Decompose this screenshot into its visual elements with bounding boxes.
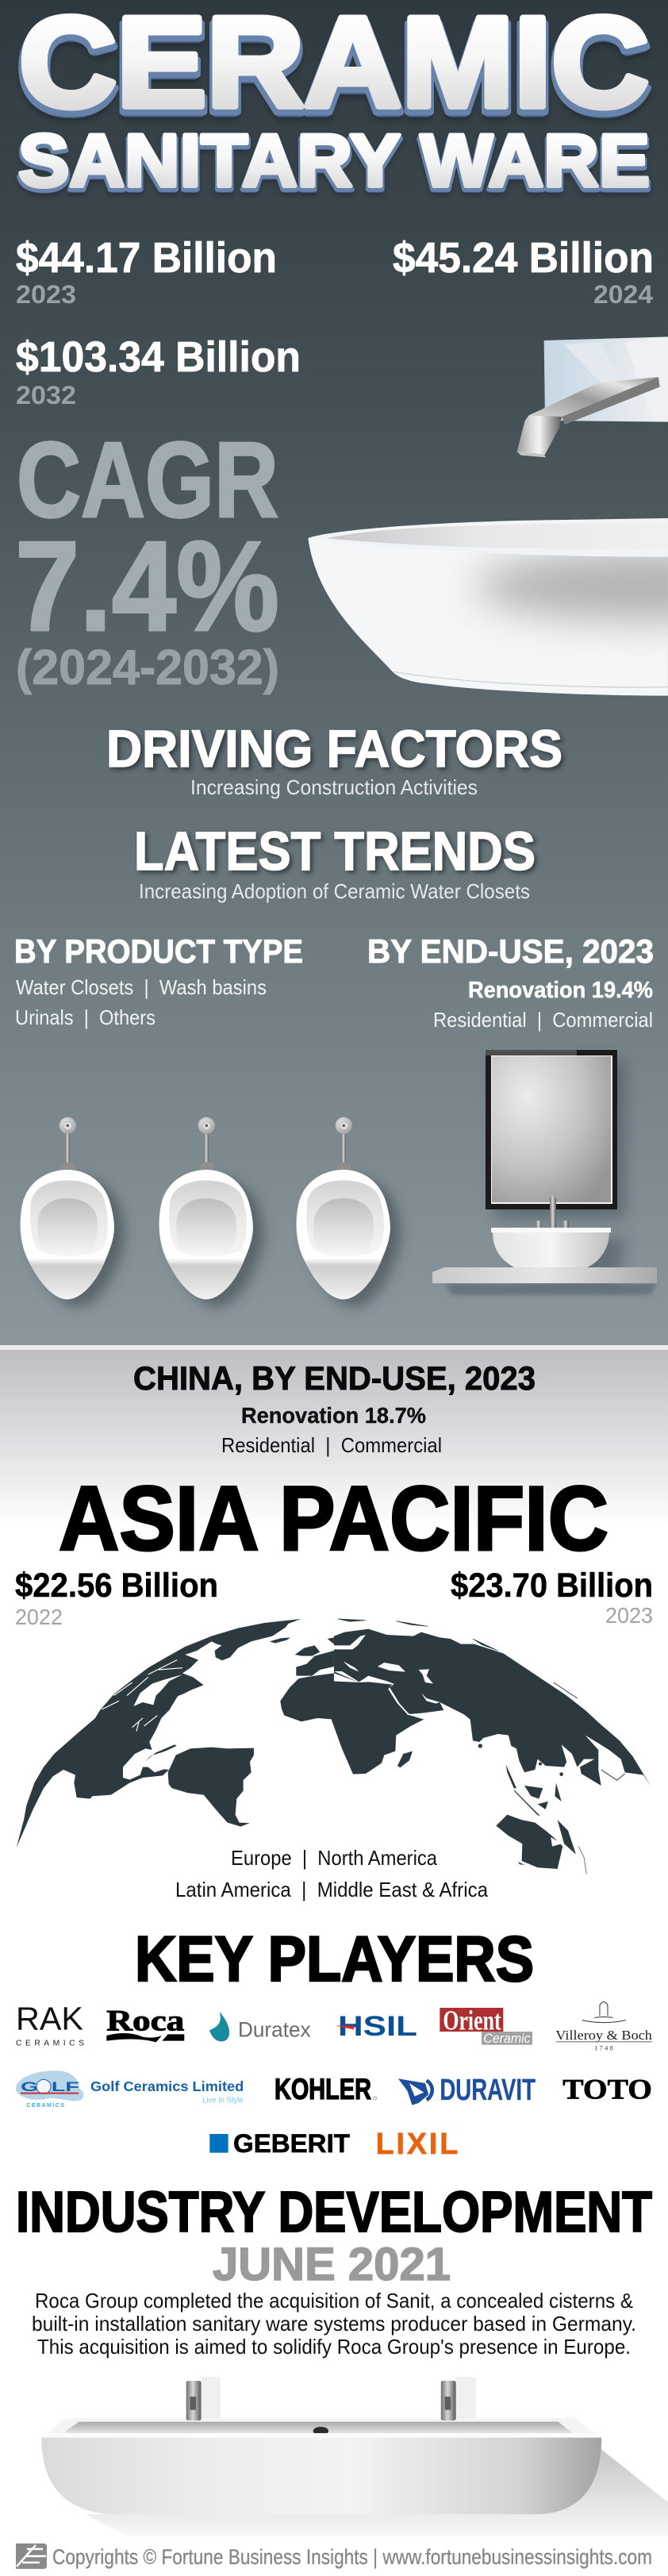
heading: China by end-use: CHINA, BY END-USE, 2023: [133, 1359, 536, 1397]
text: end-use values: Residential | Commercial: [433, 1008, 653, 1032]
icon: urinal 3: [297, 1117, 401, 1307]
text: product types: [15, 975, 267, 1029]
icon: urinal 1: [21, 1117, 125, 1307]
text: development description: [32, 2289, 636, 2359]
title: Sanitary Ware: SANITARY WARE: [18, 125, 650, 209]
logo: Duravit: [398, 2073, 536, 2106]
text: China renovation share: Renovation 18.7%: [241, 1403, 426, 1428]
text: China end-use segments: Residential | Commercial: [221, 1433, 442, 1457]
stat: 2032 market size: [16, 333, 301, 409]
stat: 2024 market size: [393, 234, 654, 309]
panel: dark hero background: [0, 0, 668, 1345]
stat: 2032 market size: $103.34 Billion: [16, 333, 301, 381]
heading: by product type: BY PRODUCT TYPE: [14, 932, 303, 970]
logo: RAK Ceramics: RAK: [16, 2000, 83, 2036]
stat: CAGR: [15, 420, 279, 695]
stat: Asia Pacific 2022: $22.56 Billion: [15, 1567, 218, 1605]
logos: key players left half: [16, 2000, 458, 2160]
stat: 2023 market size: 2023: [16, 280, 76, 309]
title: Ceramic: CERAMIC: [17, 0, 647, 140]
stat: 2024 market size: $45.24 Billion: [393, 234, 654, 282]
heading: driving factors: DRIVING FACTORS: [106, 719, 562, 778]
logo: Golf Ceramics Limited: Golf Ceramics Limited: [90, 2078, 244, 2094]
text: product types: Urinals | Others: [15, 1005, 155, 1029]
stat: Asia Pacific 2023: $23.70 Billion: [451, 1567, 653, 1605]
stat: 2024 market size: 2024: [593, 280, 653, 309]
logo: Golf Ceramics Limited: G LF: [21, 2079, 79, 2094]
logo: Villeroy and Boch: [555, 2001, 652, 2051]
logo: HSIL: HSIL: [338, 2011, 417, 2042]
stat: Asia Pacific 2023: 2023: [605, 1603, 653, 1628]
heading: date: JUNE 2021: [213, 2239, 451, 2290]
stat: Asia Pacific 2022: [15, 1567, 218, 1629]
logo: Duratex: [209, 2012, 311, 2042]
stat: 2032 market size: 2032: [16, 381, 76, 409]
text: other regions line 2: Latin America | Middle East & Africa: [175, 1878, 488, 1901]
heading: Asia Pacific: ASIA PACIFIC: [59, 1468, 608, 1570]
icon: mirror and sink on shelf: [432, 1050, 657, 1295]
title: Ceramic: CERAMIC: [21, 0, 651, 140]
text: end-use values: [433, 978, 653, 1032]
logo: Lixil: LIXIL: [376, 2127, 458, 2160]
heading: driving factors: DRIVING FACTORS: [109, 721, 565, 780]
text: development description: This acquisition is aimed to solidify Roca Group's presence in Europe.: [37, 2335, 631, 2359]
heading: key players: KEY PLAYERS: [135, 1924, 534, 1995]
logo: Villeroy and Boch: 1748: [594, 2044, 613, 2051]
heading: latest trends: LATEST TRENDS: [134, 821, 536, 882]
text: driving factor: Increasing Construction Activities: [190, 775, 478, 799]
stat: 2023 market size: $44.17 Billion: [16, 234, 277, 282]
text: other regions line 1: Europe | North America: [231, 1846, 437, 1870]
heading: by end-use: BY END-USE, 2023: [367, 932, 654, 970]
logo: Duravit: DURAVIT: [440, 2073, 536, 2106]
icon: urinal 2: [159, 1117, 263, 1307]
logo: Golf Ceramics Limited: CERAMICS: [26, 2103, 64, 2109]
icon: wall faucet: [517, 336, 668, 457]
icon: Fortune Business Insights logo: [16, 2543, 47, 2569]
logo: Toto: TOTO: [562, 2073, 652, 2105]
stat: CAGR: 7.4%: [15, 515, 279, 658]
stat: CAGR: (2024-2032): [16, 640, 279, 695]
logo: Orient Ceramic: Orient: [443, 2005, 501, 2036]
title: Sanitary Ware: SANITARY WARE: [18, 119, 650, 202]
title: Sanitary Ware: SANITARY WARE: [20, 122, 651, 206]
logo: Golf Ceramics Limited: Live In Style: [202, 2096, 244, 2105]
stat: CAGR: CAGR: [17, 420, 278, 540]
logo: Duratex: Duratex: [238, 2018, 311, 2042]
logo: Orient Ceramic: [440, 2005, 532, 2046]
logo: Villeroy and Boch: Villeroy & Boch: [555, 2028, 652, 2043]
text: latest trend: Increasing Adoption of Ceramic Water Closets: [139, 879, 530, 903]
logo: Kohler: KOHLER: [274, 2073, 371, 2105]
logo: Orient Ceramic: Ceramic: [483, 2031, 531, 2046]
stat: 2023 market size: [16, 234, 277, 309]
icon: ceramic basin: [308, 518, 668, 696]
logo: RAK Ceramics: CERAMICS: [16, 2039, 84, 2047]
panel: China section background: [0, 1345, 668, 1528]
logos: key players right half: [336, 2001, 652, 2106]
logo: Geberit: GEBERIT: [233, 2128, 350, 2158]
text: end-use values: Renovation 19.4%: [468, 978, 653, 1003]
icon: double washbasin: [41, 2377, 668, 2536]
logo: Roca: Roca: [106, 2005, 185, 2037]
text: development description: built-in installation sanitary ware systems producer based in Germany.: [32, 2312, 636, 2336]
heading: latest trends: LATEST TRENDS: [136, 823, 538, 884]
text: product types: Water Closets | Wash basins: [16, 975, 267, 999]
title: Sanitary Ware: SANITARY WARE: [18, 123, 650, 206]
logo: Golf Ceramics Limited: [16, 2070, 244, 2109]
title: Sanitary Ware: SANITARY WARE: [17, 122, 648, 206]
chart: world map globe: [17, 1619, 651, 1874]
stat: Asia Pacific 2023: [451, 1567, 653, 1628]
title: Ceramic: CERAMIC: [19, 0, 649, 141]
stat: Asia Pacific 2022: 2022: [15, 1605, 63, 1629]
text: development description: Roca Group completed the acquisition of Sanit, a concealed cisterns &: [35, 2289, 633, 2313]
title: Ceramic: CERAMIC: [19, 0, 649, 144]
